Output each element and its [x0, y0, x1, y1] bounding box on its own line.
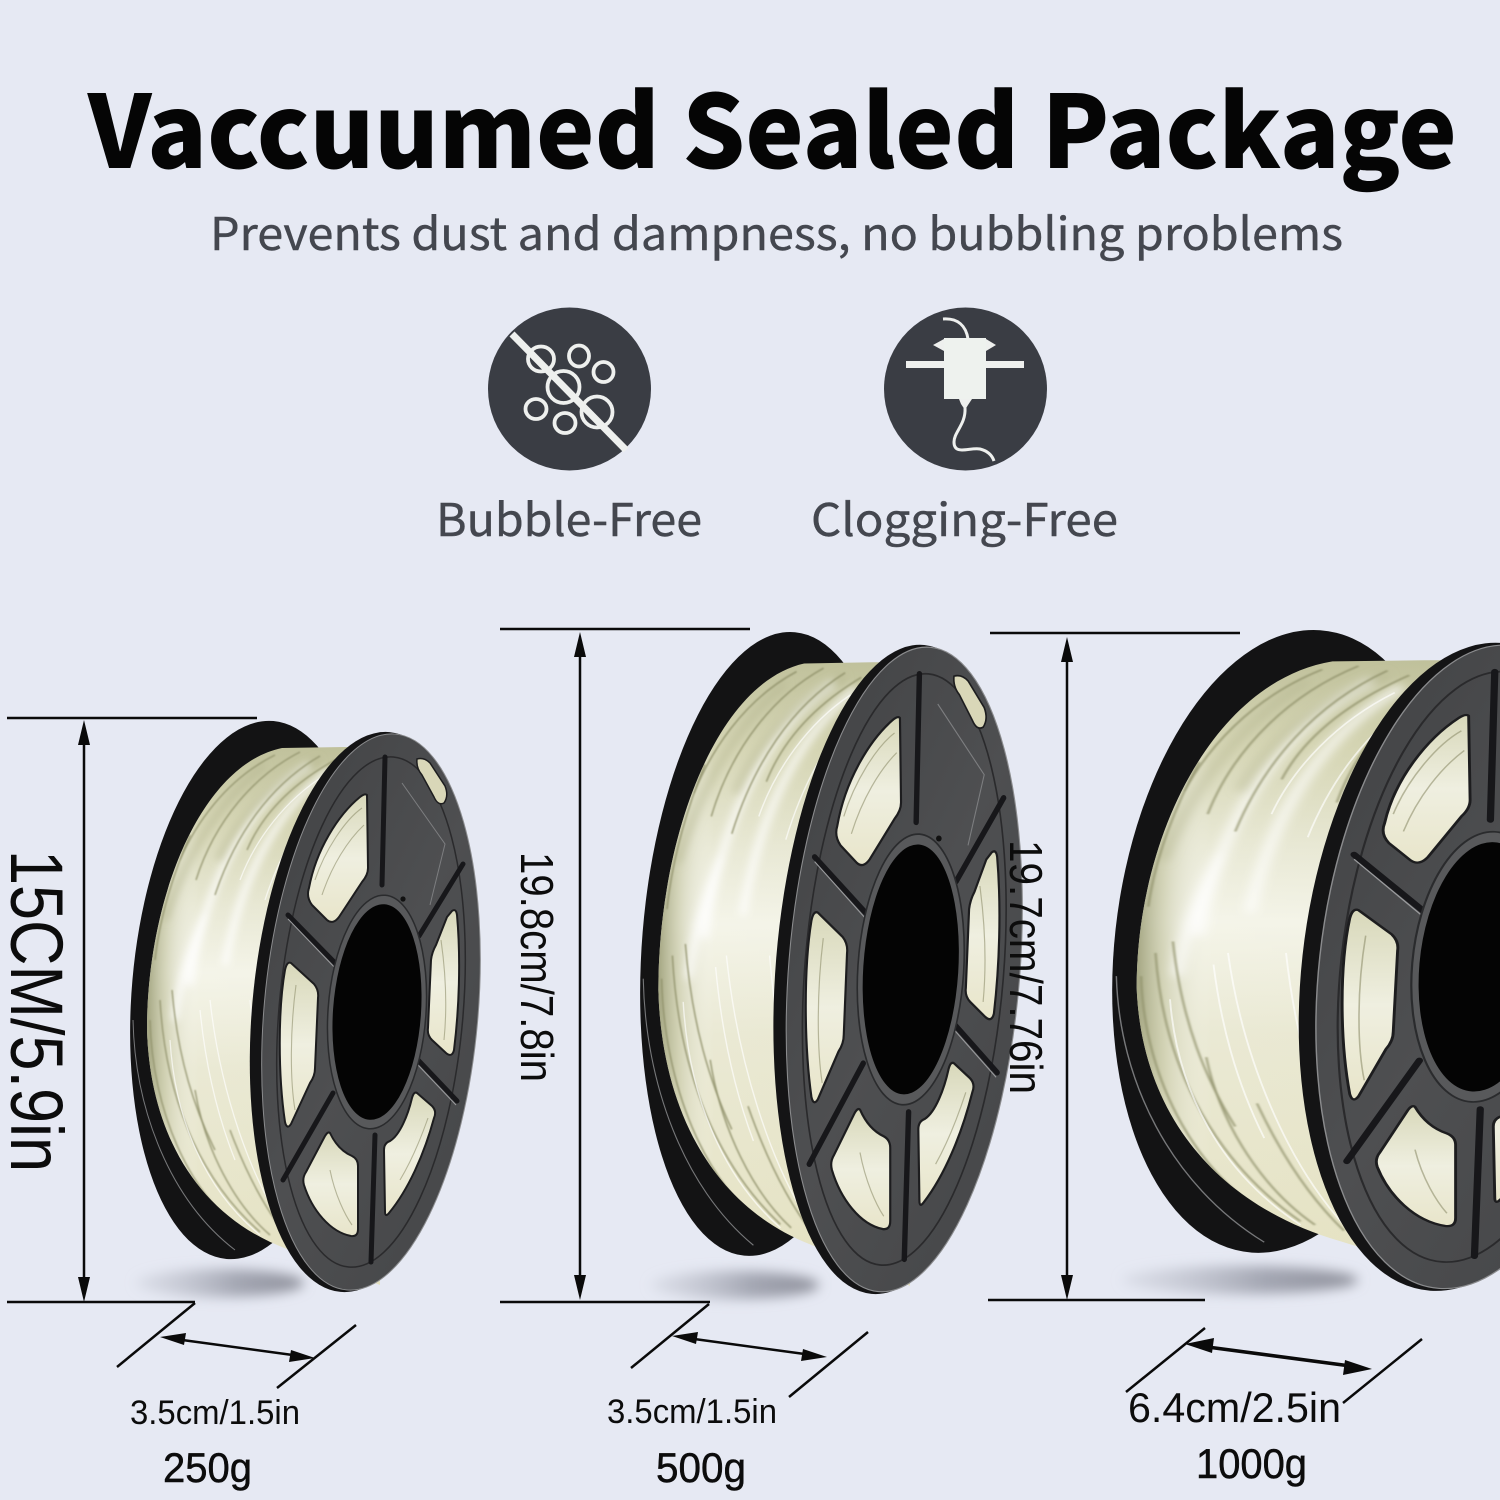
depth label: 500g: 3.5cm/1.5in: [607, 1393, 777, 1431]
dimension lines: 250g: [7, 718, 356, 1388]
spool: 500g: [617, 620, 1046, 1305]
depth label: 1000g: 6.4cm/2.5in: [1128, 1384, 1341, 1431]
weight label: 250g: 250g: [163, 1444, 252, 1491]
height label: 500g: 19.8cm/7.8in: [511, 852, 563, 1082]
icon: clogging-free: [884, 308, 1047, 470]
label: Bubble-Free: Bubble-Free: [436, 484, 702, 549]
weight label: 1000g: 1000g: [1196, 1440, 1307, 1487]
height label: 1000g: 19.7cm/7.76in: [1000, 840, 1052, 1094]
title: Vaccuumed Sealed Package: [87, 52, 1457, 198]
spool: 250g: [109, 711, 502, 1302]
depth label: 250g: 3.5cm/1.5in: [130, 1394, 300, 1432]
label: Clogging-Free: Clogging-Free: [811, 484, 1118, 549]
icon: bubble-free: [488, 308, 651, 470]
subtitle: Prevents dust and dampness, no bubbling problems: [210, 198, 1343, 263]
dimension lines: 500g: [500, 629, 868, 1397]
weight label: 500g: 500g: [656, 1444, 746, 1491]
spool: 1000g: [1081, 618, 1500, 1302]
dimension lines: 1000g: [988, 633, 1422, 1403]
